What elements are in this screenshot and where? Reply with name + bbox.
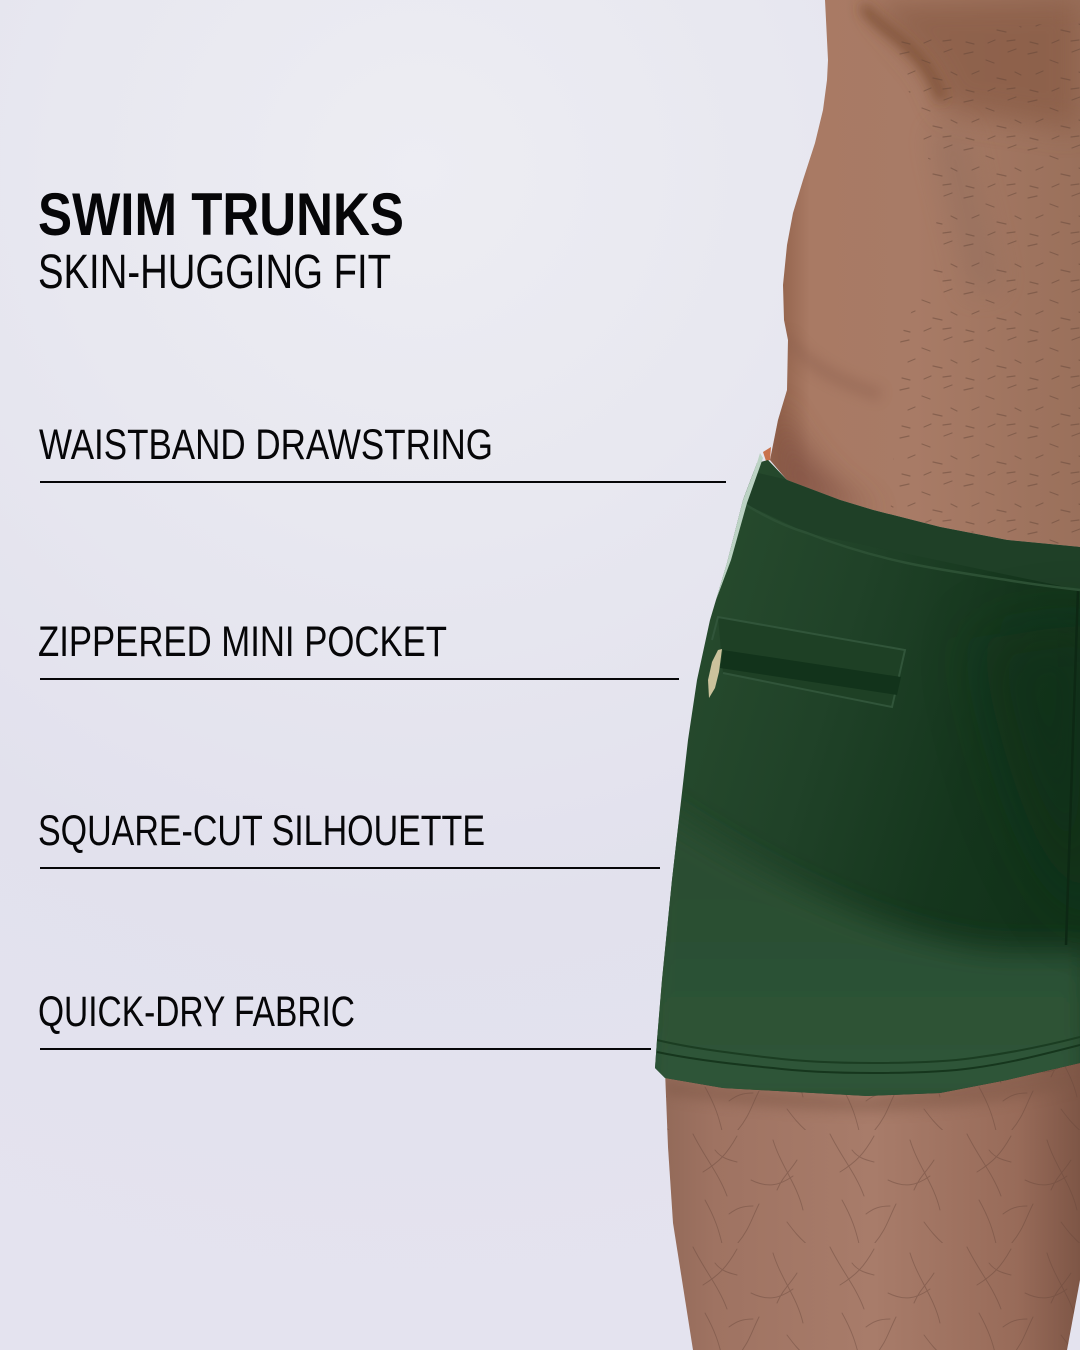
feature: waistband drawstring: WAISTBAND DRAWSTRING [39,421,493,469]
title: SWIM TRUNKS [38,181,404,248]
subtitle: SKIN-HUGGING FIT [38,246,391,299]
photo: model thigh [660,1040,1080,1350]
photo: green swim trunks [640,450,1080,1110]
hip shadow [770,418,861,506]
front seam [1066,590,1078,945]
photo: waistband tag [763,447,771,461]
waistband seam [743,503,1080,590]
pocket stitch [712,617,905,707]
upper body shadow [870,0,1080,130]
zipper recess [720,650,901,695]
waistband tone [743,470,1080,590]
armpit crease [863,6,942,100]
feature: square-cut silhouette: SQUARE-CUT SILHOUETTE [38,807,485,855]
stubble [890,20,1080,547]
zippered pocket [712,617,905,707]
photo: zipper pull [708,649,722,698]
photo: pale side strip of trunks [716,453,763,600]
side shadow [948,130,985,290]
rib edge [788,338,874,396]
dark fold [980,620,1080,930]
hem seam lower [657,1045,1080,1073]
feature: zippered mini pocket: ZIPPERED MINI POCKET [38,618,447,666]
hem seam upper [657,1037,1080,1063]
lower lit panel [640,800,1080,1110]
photo: model torso [770,0,1080,550]
feature: quick-dry fabric: QUICK-DRY FABRIC [38,988,355,1036]
